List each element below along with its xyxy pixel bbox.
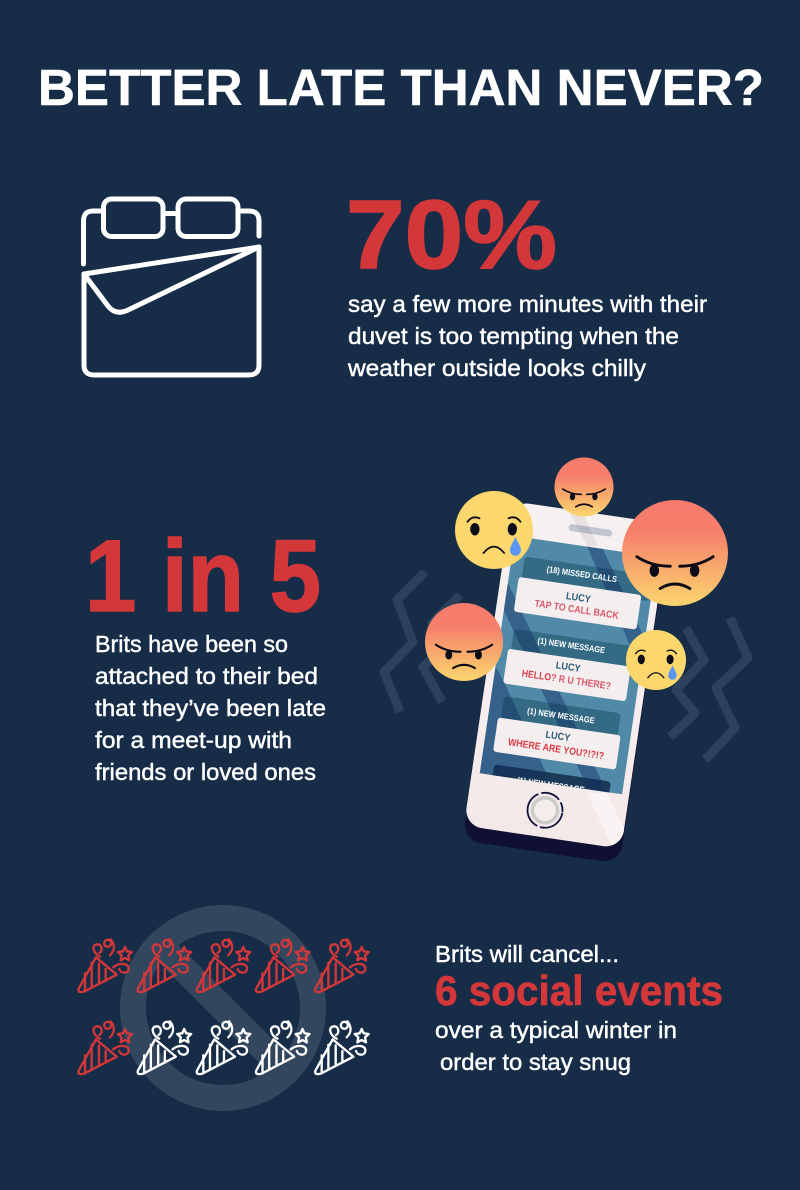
statistic: 6 social events: 6 social events (435, 967, 723, 1014)
notification labels: (1) NEW MESSAGE (516, 775, 585, 795)
screen (480, 538, 651, 794)
notification labels (515, 564, 618, 795)
notification header: new message 2 (501, 696, 620, 735)
panel: duvet statistic (84, 180, 707, 381)
panel: late for meet-ups statistic (85, 519, 326, 785)
icon: small angry emoji top (554, 458, 614, 516)
text: meet-up description: for a meet-up with (95, 727, 292, 753)
speaker (568, 524, 613, 537)
icon: prohibition sign (133, 918, 313, 1098)
message card: Hello: LUCY (555, 660, 582, 675)
text: Brits will cancel: Brits will cancel... (435, 941, 619, 967)
text: meet-up description: attached to their bed (95, 663, 318, 689)
icon: phone vibration lines (384, 572, 748, 760)
notification header: missed calls (521, 557, 653, 601)
text: over a typical winter: over a typical winter in (435, 1017, 677, 1043)
home button (525, 790, 565, 830)
text: meet-up description (95, 631, 326, 785)
phone shadow (462, 516, 668, 864)
text: duvet description: duvet is too tempting when the (348, 323, 679, 349)
message card: Hello (503, 649, 631, 701)
illustration: phone with notifications (425, 458, 728, 864)
text: meet-up description: Brits have been so (95, 631, 288, 657)
phone body (464, 501, 669, 849)
statistic: 1 in 5: 1 in 5 (85, 519, 321, 633)
icon: angry emoji left (425, 603, 503, 681)
notification labels: (18) MISSED CALLS (546, 564, 618, 584)
notification header: new message 3 (492, 764, 610, 792)
text: duvet description (347, 291, 707, 381)
text: duvet description: say a few more minutes with their (348, 291, 707, 317)
notification labels: (1) NEW MESSAGE (537, 635, 606, 655)
icon group: ten party poppers (78, 939, 369, 1074)
message card: Tap to call back (514, 577, 641, 630)
text: over a typical winter: order to stay snug (440, 1049, 631, 1075)
message card: Where are you (493, 717, 621, 770)
icon: crying emoji right (626, 630, 686, 690)
panel: cancelled social events (78, 918, 723, 1098)
text: duvet description: weather outside looks chilly (347, 355, 647, 381)
body light reflections (570, 513, 624, 846)
message card: Tap to call back: TAP TO CALL BACK (534, 599, 620, 622)
notification header: new message 1 (511, 630, 630, 666)
message card: Where are you: WHERE ARE YOU?!?!? (507, 737, 605, 762)
text: over a typical winter (435, 1017, 677, 1075)
message card: Tap to call back: LUCY (565, 591, 592, 606)
icon: large angry emoji (622, 500, 728, 606)
message card: Where are you: LUCY (545, 730, 571, 744)
text: meet-up description: friends or loved ones (95, 759, 316, 785)
statistic: 70%: 70% (346, 180, 557, 289)
screen dark reflection bands (480, 546, 642, 792)
message card: Hello: HELLO? R U THERE? (521, 668, 612, 692)
text: meet-up description: that they’ve been late (95, 695, 326, 721)
notification labels: (1) NEW MESSAGE (527, 706, 596, 726)
icon: crying emoji left (455, 491, 533, 569)
title: BETTER LATE THAN NEVER? (38, 59, 764, 116)
icon: bed with duvet and pillows (84, 199, 259, 375)
